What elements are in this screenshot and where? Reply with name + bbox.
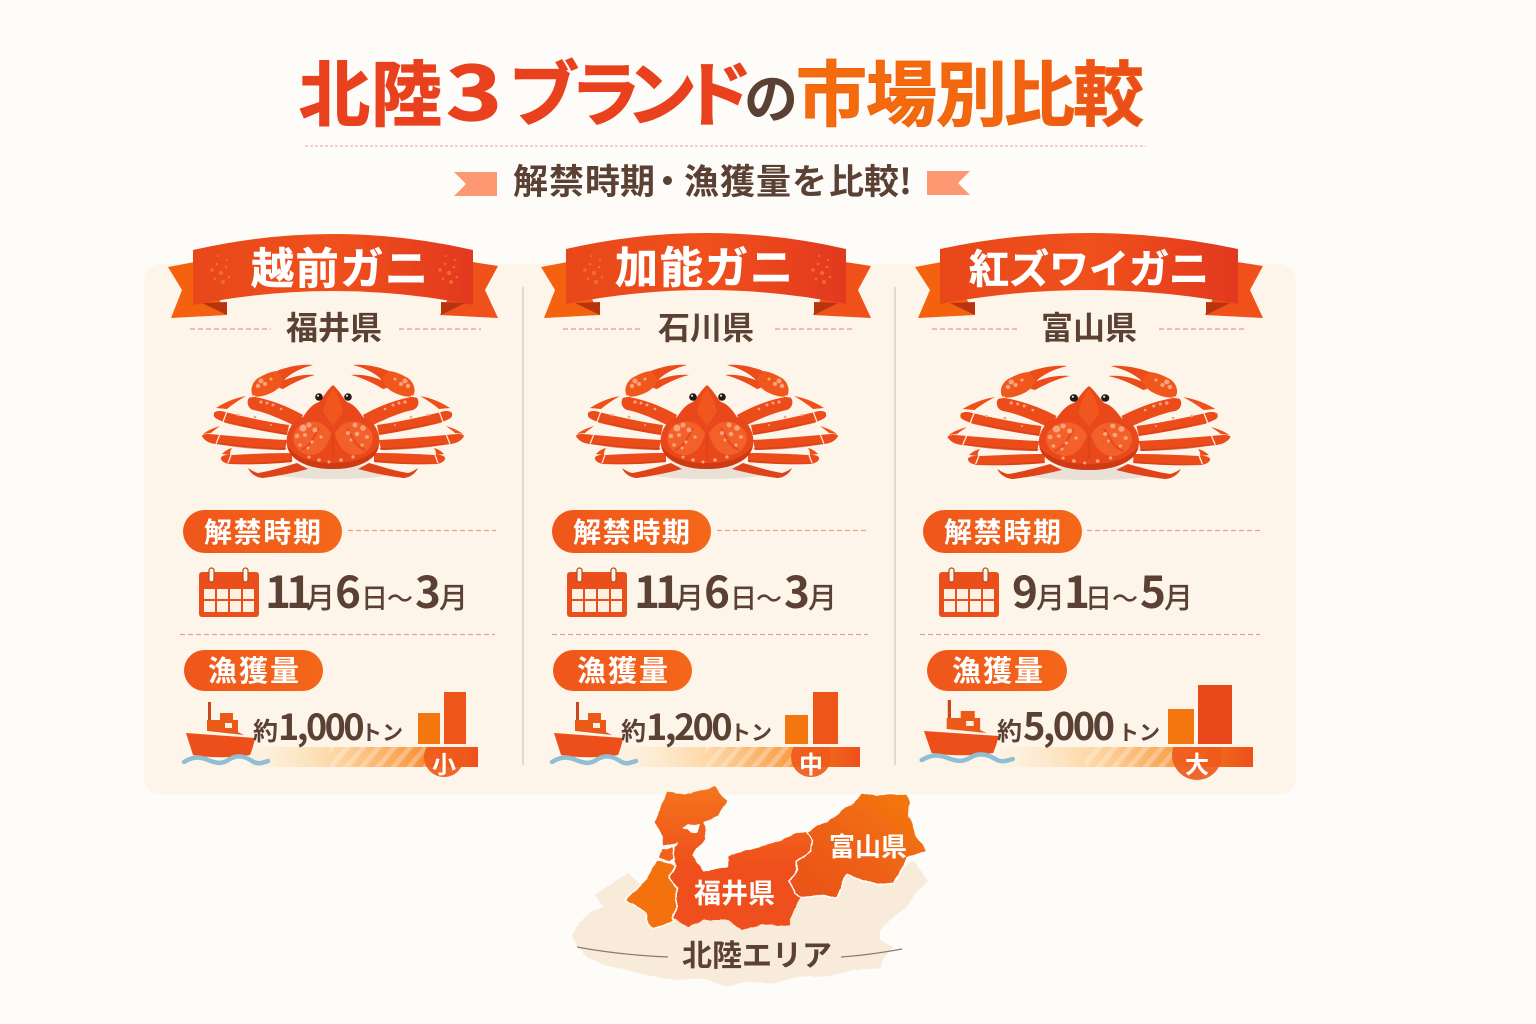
season: 11月6日〜3月: 日 <box>361 577 388 616</box>
ribbon: 越前ガニ <box>168 234 498 318</box>
map label: 福井県: 福井県 <box>694 872 775 911</box>
label: 解禁時期 <box>923 510 1260 553</box>
season: 11月6日〜3月: 日 <box>730 577 757 616</box>
icon: right subtitle flag <box>927 171 970 195</box>
icon: fishing boat <box>552 702 636 763</box>
panel: 越前ガニ <box>168 234 498 780</box>
subtitle with ribbons <box>454 154 970 205</box>
icon: crab <box>576 365 838 479</box>
title: 市場別比較 <box>796 39 1144 141</box>
size strip: 中: 中 <box>799 745 823 780</box>
catch: 約5,000トン: 約 <box>997 712 1022 748</box>
catch: 約1,000トン: 1,000 <box>278 699 363 751</box>
bar chart: catch medium <box>785 692 838 744</box>
map regions <box>625 786 927 930</box>
season: 9月1日〜5月: 日 <box>1085 577 1112 616</box>
label: 解禁時期 <box>183 510 496 553</box>
map label: 富山県: 富山県 <box>829 827 907 864</box>
title: 3 <box>446 35 502 142</box>
panel: comparison background <box>144 264 1296 794</box>
ribbon: 加能ガニ: 加能ガニ <box>615 234 793 296</box>
season: 11月6日〜3月: 〜 <box>756 579 782 616</box>
label: 解禁時期: 解禁時期 <box>944 511 1061 551</box>
map caption: 北陸エリア: 北陸エリア <box>682 931 832 975</box>
catch: 約5,000トン: トン <box>1118 717 1160 747</box>
size strip: 小: 小 <box>432 745 456 780</box>
icon: fishing boat <box>184 702 268 763</box>
map: 富山県 right region <box>789 793 927 898</box>
ribbon: 紅ズワイガニ <box>915 233 1263 318</box>
size strip: 大: 大 <box>1185 745 1209 780</box>
season: 9月1日〜5月: 〜 <box>1112 579 1138 616</box>
catch: 約1,000トン: トン <box>361 717 403 747</box>
map: 福井県 central region with Noto peninsula <box>655 786 812 930</box>
bar chart: catch small <box>418 692 466 744</box>
icon: calendar <box>939 568 999 617</box>
label: 漁獲量: 漁獲量 <box>208 648 299 690</box>
map: small boundary region <box>658 846 675 862</box>
label: 漁獲量 <box>927 648 1067 691</box>
map caption: 北陸エリア <box>577 931 902 975</box>
season: 9月1日〜5月: 9 <box>1012 557 1038 621</box>
icon: crab <box>202 365 464 479</box>
label: 解禁時期: 解禁時期 <box>204 511 321 551</box>
season: 11月6日〜3月: 3 <box>784 557 810 621</box>
label: 漁獲量 <box>184 648 323 691</box>
size strip: 大 <box>1000 745 1253 780</box>
catch: 約1,000トン: 約 <box>253 712 278 748</box>
map land background <box>572 860 928 987</box>
catch: 約1,200トン: 約 <box>621 712 646 748</box>
panel: 加能ガニ <box>541 233 871 780</box>
season: 11月6日〜3月: 月 <box>808 575 837 617</box>
season: 9月1日〜5月: 1 <box>1064 557 1090 621</box>
catch: 約1,200トン: 1,200 <box>646 699 731 751</box>
size strip: 中 <box>620 745 860 780</box>
subtitle: 解禁時期・漁獲量を比較! <box>513 154 912 205</box>
label: 解禁時期: 解禁時期 <box>573 511 690 551</box>
column divider <box>522 287 524 765</box>
title <box>299 35 1144 142</box>
season: 11月6日〜3月: 3 <box>415 557 441 621</box>
catch: 約5,000トン: 5,000 <box>1023 696 1114 751</box>
bar chart: catch large <box>1168 685 1232 744</box>
season: 11月6日〜3月: 月 <box>675 575 704 617</box>
season: 9月1日〜5月: 月 <box>1036 575 1065 617</box>
ribbon: 紅ズワイガニ: 紅ズワイガニ <box>969 237 1209 295</box>
panel: 紅ズワイガニ <box>915 233 1263 780</box>
icon: fishing boat <box>922 700 1013 761</box>
prefecture: 石川県: 石川県 <box>658 303 754 349</box>
prefecture: 富山県: 富山県 <box>1041 303 1137 349</box>
season: 11月6日〜3月: 月 <box>306 575 335 617</box>
label: 漁獲量: 漁獲量 <box>577 648 668 690</box>
season: 11月6日〜3月: 6 <box>335 557 361 621</box>
catch: 約1,200トン: トン <box>730 717 772 747</box>
season: 11月6日〜3月: 〜 <box>387 579 413 616</box>
label: 解禁時期 <box>552 510 869 553</box>
title divider <box>305 145 1146 147</box>
prefecture: 福井県: 福井県 <box>286 303 382 349</box>
season: 11月6日〜3月: 月 <box>439 575 468 617</box>
size strip: 小 <box>250 745 478 780</box>
map: left region <box>625 860 677 928</box>
title: ブランド <box>508 39 753 141</box>
season: 9月1日〜5月: 月 <box>1164 575 1193 617</box>
label: 漁獲量: 漁獲量 <box>952 648 1043 690</box>
map: 北陸エリア <box>572 786 928 987</box>
icon: calendar <box>567 568 627 617</box>
ribbon: 加能ガニ <box>541 233 871 318</box>
label: 漁獲量 <box>553 648 692 691</box>
icon: crab <box>948 366 1230 480</box>
column divider <box>894 287 896 765</box>
title: の <box>744 55 798 134</box>
season: 11月6日〜3月: 11 <box>265 557 310 621</box>
season: 9月1日〜5月: 5 <box>1140 557 1166 621</box>
icon: calendar <box>199 568 259 617</box>
icon: left subtitle flag <box>454 172 497 196</box>
ribbon: 越前ガニ: 越前ガニ <box>251 235 428 297</box>
map: inland bay <box>683 824 700 833</box>
title: 北陸 <box>299 39 442 141</box>
season: 11月6日〜3月: 11 <box>634 557 679 621</box>
season: 11月6日〜3月: 6 <box>704 557 730 621</box>
